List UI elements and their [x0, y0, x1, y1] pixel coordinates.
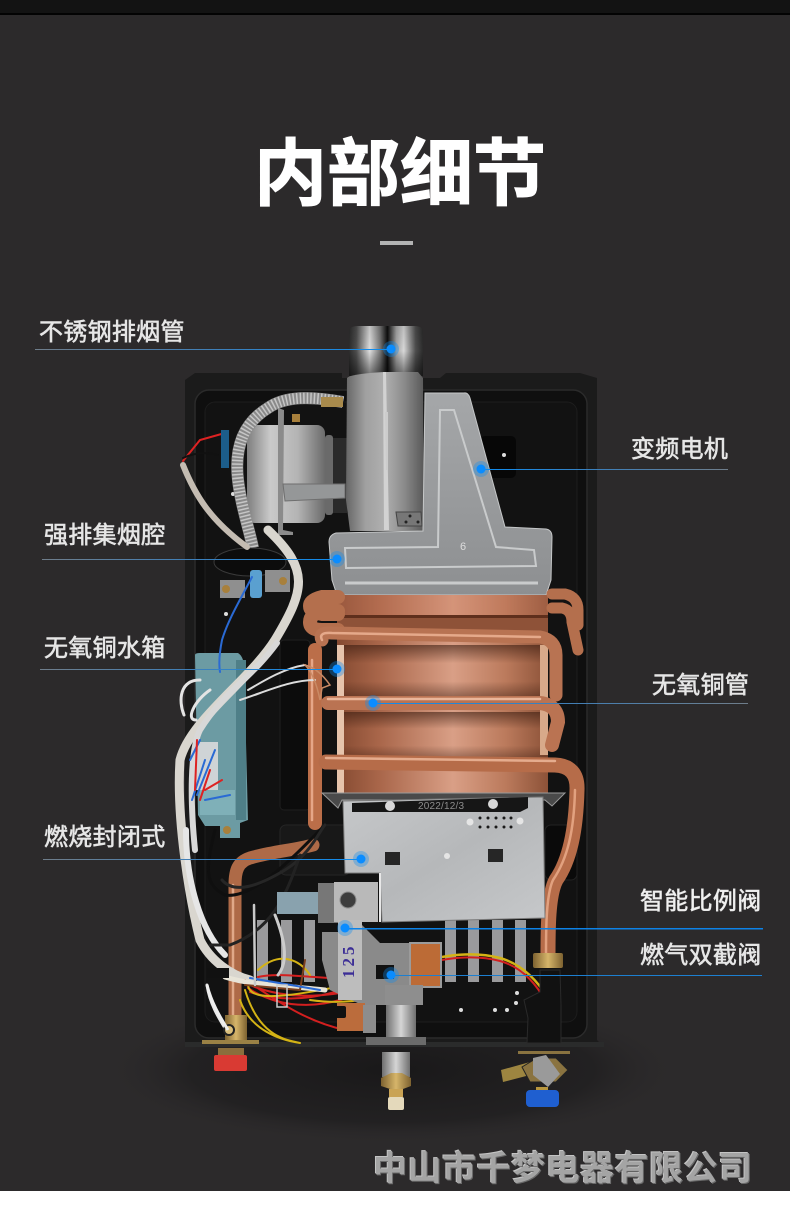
blue ignition module [195, 653, 248, 838]
company name: 中山市千梦电器有限公司 [373, 1150, 752, 1188]
brass elbow and black water fitting [202, 953, 563, 1044]
label: 无氧铜水箱: 无氧铜水箱 [44, 635, 166, 662]
copper heat exchanger body [337, 595, 548, 800]
label: 智能比例阀: 智能比例阀 [640, 888, 762, 915]
control box top flange [322, 793, 565, 808]
panel holes [224, 453, 519, 1012]
combustion enclosure box: 2022/12/3 [418, 801, 465, 812]
title underline [380, 241, 413, 245]
callout: water box [40, 661, 345, 677]
callout: dual shutoff valve [383, 967, 762, 983]
wires and braided cables [179, 430, 548, 1043]
motor [247, 408, 347, 535]
label: 燃气双截阀: 燃气双截阀 [640, 942, 762, 969]
heater shadow glow [102, 995, 682, 1145]
callout: proportional valve [337, 920, 763, 936]
bottom white band [0, 1191, 790, 1214]
red water inlet cap [214, 1048, 247, 1071]
gas proportional valve and dual shutoff valve [277, 882, 441, 1045]
callout: combustion [43, 851, 369, 867]
label: 无氧铜管: 无氧铜管 [652, 672, 749, 699]
slotted metal strips [257, 920, 526, 982]
callout: motor [473, 461, 728, 477]
label: 变频电机: 变频电机 [631, 436, 728, 463]
stainless flue pipe [349, 326, 423, 376]
collector chamber [329, 393, 552, 595]
title: 内部细节 [254, 134, 546, 215]
label: 强排集烟腔: 强排集烟腔 [44, 522, 166, 549]
combustion enclosure box [343, 797, 545, 922]
drain valve with blue cap [501, 1051, 570, 1107]
copper tubes [233, 594, 578, 1020]
collector chamber: 6 [460, 541, 466, 553]
fan housing [346, 372, 424, 531]
brass gas connector [381, 1052, 411, 1110]
callout lines and markers [35, 341, 763, 983]
callout: stainless flue [35, 341, 399, 357]
callout: collector [42, 551, 345, 567]
grey corrugated hose [237, 397, 343, 548]
back panel [185, 373, 604, 1047]
callout: copper tube [365, 695, 748, 711]
gas proportional valve and dual shutoff valve: 125 [339, 944, 358, 978]
pressure switch [214, 548, 290, 598]
top black strip [0, 0, 790, 15]
water heater product photo [35, 326, 763, 1110]
label: 不锈钢排烟管: 不锈钢排烟管 [39, 319, 185, 346]
label: 燃烧封闭式: 燃烧封闭式 [44, 824, 166, 851]
